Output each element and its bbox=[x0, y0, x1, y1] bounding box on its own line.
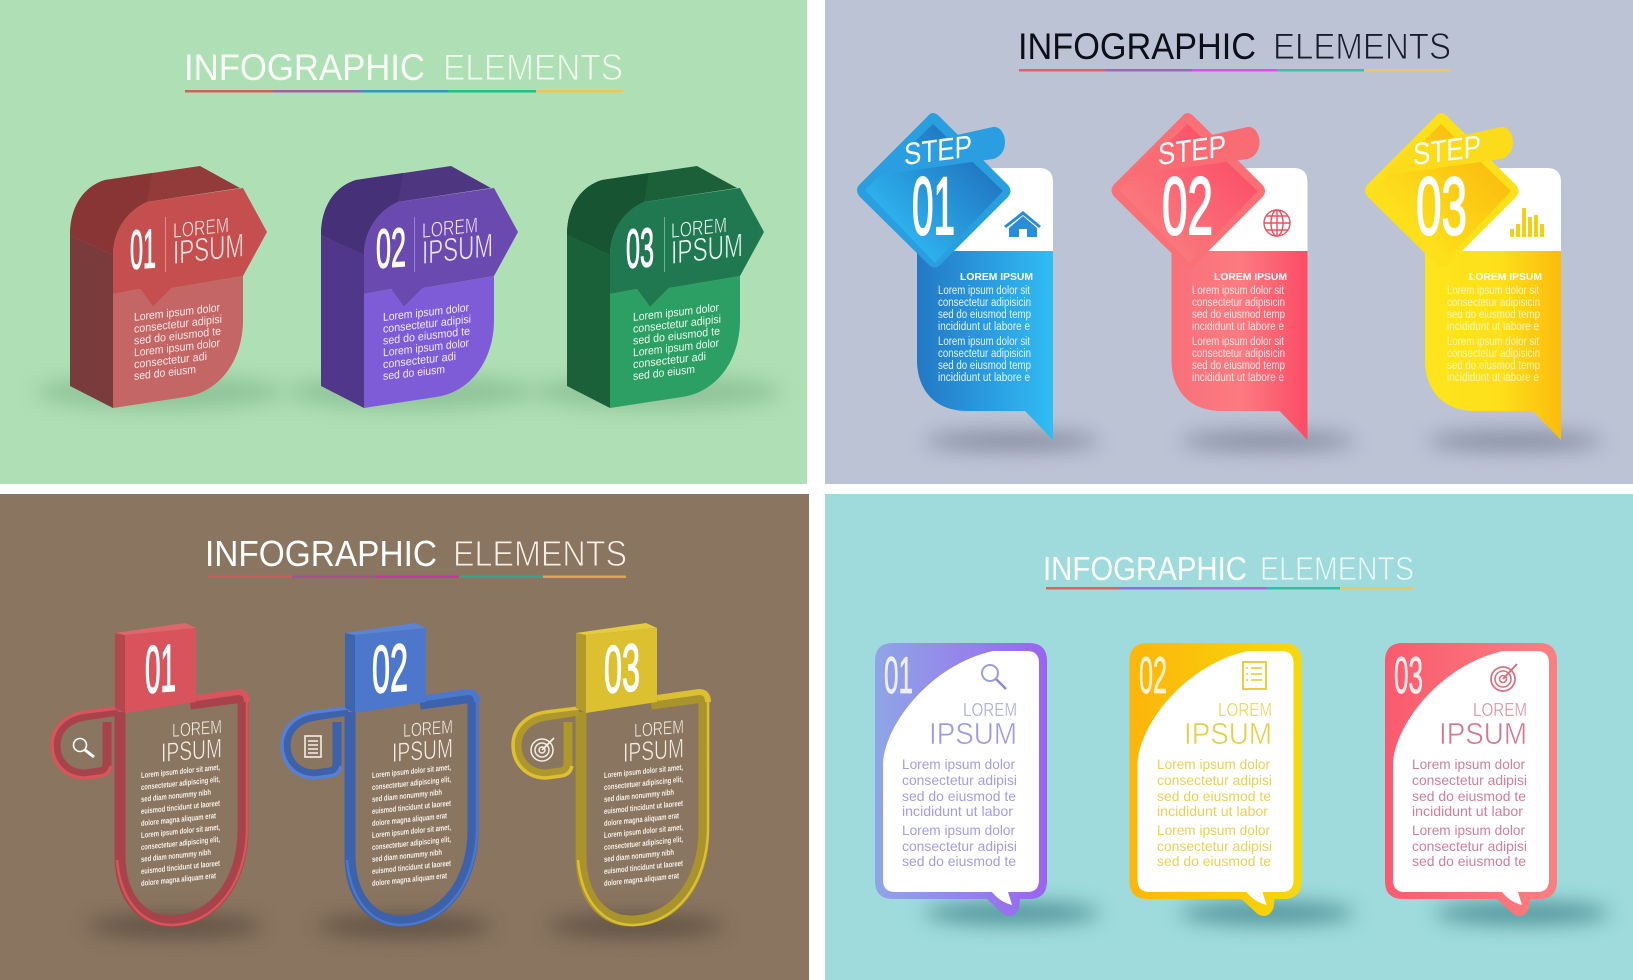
step card 03 yellow: sed do eiusmod temp bbox=[1447, 309, 1540, 321]
tag 01 red outline: Lorem ipsum dolor sit amet, bbox=[141, 823, 220, 840]
step card 03 yellow bbox=[1365, 113, 1603, 450]
step card 01 blue: sed do eiusmod temp bbox=[938, 360, 1031, 372]
bubble 01 purple: 01 bbox=[884, 647, 913, 705]
tag 03 gold outline bbox=[513, 623, 724, 937]
tag 03 gold outline: dolore magna aliquam erat bbox=[604, 811, 679, 828]
step card 03 yellow: sed do eiusmod temp bbox=[1447, 360, 1540, 372]
step card 02 red: 02 bbox=[1162, 161, 1213, 252]
tag 02 blue outline: consectetuer adipiscing elit, bbox=[372, 835, 451, 852]
tag 01 red: consectetur adipisi bbox=[134, 314, 222, 336]
icon: magnifier bbox=[982, 665, 1006, 689]
bubble 02 amber: consectetur adipisi bbox=[1157, 772, 1272, 788]
title: teal panel: INFOGRAPHIC bbox=[1043, 550, 1247, 587]
bubble 03 coral: consectetur adipisi bbox=[1412, 838, 1527, 854]
icon: bar chart bbox=[1510, 208, 1544, 237]
tag 02 blue outline: consectetuer adipiscing elit, bbox=[372, 775, 451, 792]
bubble 01 purple bbox=[875, 643, 1100, 924]
tag 01 red outline: 01 bbox=[145, 631, 176, 708]
step card 01 blue: STEP bbox=[904, 129, 972, 172]
step card 02 red: incididunt ut labore e bbox=[1192, 321, 1284, 333]
icon: magnifier bbox=[74, 738, 94, 757]
bubble 02 amber: Lorem ipsum dolor bbox=[1157, 822, 1270, 838]
tag 01 red: IPSUM bbox=[173, 227, 244, 272]
tag 02 purple: sed do eiusm bbox=[383, 364, 445, 383]
tag 01 red: Lorem ipsum dolor bbox=[134, 338, 220, 359]
step card 01 blue: LOREM IPSUM bbox=[960, 271, 1033, 283]
bubble 01 purple: incididunt ut labor bbox=[902, 803, 1013, 819]
title: lavender panel bbox=[1018, 26, 1451, 72]
title: brown panel bbox=[205, 533, 627, 578]
title: brown panel: ELEMENTS bbox=[453, 533, 627, 574]
tag 02 blue outline: 02 bbox=[372, 630, 408, 708]
step card 02 red: LOREM IPSUM bbox=[1214, 271, 1287, 283]
bubble 03 coral: incididunt ut labor bbox=[1412, 803, 1523, 819]
bubble 03 coral: sed do eiusmod te bbox=[1412, 788, 1526, 804]
tag 03 gold outline: 03 bbox=[604, 630, 640, 708]
tag 02 blue outline: euismod tincidunt ut laoreet bbox=[372, 799, 451, 816]
bubble 01 purple: sed do eiusmod te bbox=[902, 788, 1016, 804]
title: green panel bbox=[184, 47, 623, 92]
tag 03 gold outline: euismod tincidunt ut laoreet bbox=[604, 799, 683, 816]
tag 02 purple: Lorem ipsum dolor bbox=[383, 302, 469, 324]
tag 02 purple bbox=[286, 166, 536, 410]
tag 01 red outline: Lorem ipsum dolor sit amet, bbox=[141, 763, 220, 780]
tag 03 gold outline: IPSUM bbox=[623, 733, 684, 768]
tag 01 red outline: dolore magna aliquam erat bbox=[141, 871, 216, 888]
step card 01 blue bbox=[857, 113, 1100, 450]
bubble 02 amber: IPSUM bbox=[1184, 716, 1272, 751]
step card 01 blue: Lorem ipsum dolor sit bbox=[938, 285, 1031, 297]
tag 02 blue outline: Lorem ipsum dolor sit amet, bbox=[372, 823, 451, 840]
step card 03 yellow: incididunt ut labore e bbox=[1447, 321, 1539, 333]
step card 03 yellow: Lorem ipsum dolor sit bbox=[1447, 285, 1540, 297]
title: green panel: ELEMENTS bbox=[443, 47, 623, 88]
bubble 03 coral: Lorem ipsum dolor bbox=[1412, 822, 1525, 838]
step card 03 yellow: LOREM IPSUM bbox=[1469, 271, 1542, 283]
step card 01 blue: consectetur adipisicin bbox=[938, 297, 1031, 309]
step card 03 yellow: Lorem ipsum dolor sit bbox=[1447, 336, 1540, 348]
tag 03 green: consectetur adi bbox=[633, 351, 706, 371]
tag 02 purple: LOREM bbox=[422, 214, 478, 243]
bubble 01 purple: sed do eiusmod te bbox=[902, 853, 1016, 869]
tag 03 gold outline: Lorem ipsum dolor sit amet, bbox=[604, 763, 683, 780]
tag 01 red outline: sed diam nonummy nibh bbox=[141, 848, 211, 864]
bubble 01 purple: consectetur adipisi bbox=[902, 838, 1017, 854]
step card 01 blue: 01 bbox=[912, 161, 955, 252]
step card 02 red: STEP bbox=[1158, 129, 1226, 172]
bubble 03 coral: consectetur adipisi bbox=[1412, 772, 1527, 788]
tag 03 gold outline: euismod tincidunt ut laoreet bbox=[604, 859, 683, 876]
bubble 02 amber: consectetur adipisi bbox=[1157, 838, 1272, 854]
tag 03 green: Lorem ipsum dolor bbox=[633, 338, 719, 359]
step card 03 yellow: STEP bbox=[1413, 129, 1481, 172]
bubble 02 amber: sed do eiusmod te bbox=[1157, 788, 1271, 804]
tag 03 green: IPSUM bbox=[671, 227, 743, 272]
step card 03 yellow: consectetur adipisicin bbox=[1447, 348, 1540, 360]
tag 03 gold outline: sed diam nonummy nibh bbox=[604, 848, 674, 864]
bubble 03 coral: sed do eiusmod te bbox=[1412, 853, 1526, 869]
title: teal panel bbox=[1043, 550, 1414, 590]
bubble 02 amber: Lorem ipsum dolor bbox=[1157, 756, 1270, 772]
tag 03 gold outline: dolore magna aliquam erat bbox=[604, 871, 679, 888]
step card 01 blue: consectetur adipisicin bbox=[938, 348, 1031, 360]
tag 01 red: sed do eiusmod te bbox=[134, 326, 221, 348]
tag 03 green: 03 bbox=[626, 216, 654, 280]
tag 02 purple: IPSUM bbox=[422, 227, 493, 272]
tag 02 purple: sed do eiusmod te bbox=[383, 326, 470, 348]
bubble 02 amber: incididunt ut labor bbox=[1157, 803, 1268, 819]
step card 02 red: Lorem ipsum dolor sit bbox=[1192, 285, 1285, 297]
title: lavender panel: INFOGRAPHIC bbox=[1018, 26, 1256, 67]
icon: home bbox=[1004, 211, 1041, 237]
bubble 01 purple: IPSUM bbox=[929, 716, 1017, 751]
step card 01 blue: incididunt ut labore e bbox=[938, 321, 1030, 333]
icon: globe bbox=[1264, 210, 1290, 236]
bubble 02 amber: LOREM bbox=[1218, 700, 1272, 720]
tag 03 gold outline: LOREM bbox=[634, 717, 684, 742]
tag 01 red outline: sed diam nonummy nibh bbox=[141, 788, 211, 804]
step card 02 red: incididunt ut labore e bbox=[1192, 372, 1284, 384]
tag 01 red outline: euismod tincidunt ut laoreet bbox=[141, 799, 220, 816]
step card 02 red: consectetur adipisicin bbox=[1192, 297, 1285, 309]
step card 02 red: sed do eiusmod temp bbox=[1192, 360, 1285, 372]
tag 02 purple: Lorem ipsum dolor bbox=[383, 338, 469, 359]
tag 03 gold outline: consectetuer adipiscing elit, bbox=[604, 775, 683, 792]
bubble 01 purple: Lorem ipsum dolor bbox=[902, 822, 1015, 838]
tag 03 gold outline: Lorem ipsum dolor sit amet, bbox=[604, 823, 683, 840]
step card 01 blue: incididunt ut labore e bbox=[938, 372, 1030, 384]
bubble 03 coral: Lorem ipsum dolor bbox=[1412, 756, 1525, 772]
bubble 02 amber: sed do eiusmod te bbox=[1157, 853, 1271, 869]
step card 02 red: sed do eiusmod temp bbox=[1192, 309, 1285, 321]
tag 01 red outline: dolore magna aliquam erat bbox=[141, 811, 216, 828]
panel: teal speech bubbles bbox=[825, 494, 1633, 980]
tag 02 blue outline: sed diam nonummy nibh bbox=[372, 848, 442, 864]
tag 03 gold outline: sed diam nonummy nibh bbox=[604, 788, 674, 804]
tag 01 red outline: LOREM bbox=[172, 717, 222, 742]
icon: target bbox=[1491, 664, 1517, 691]
bubble 01 purple: consectetur adipisi bbox=[902, 772, 1017, 788]
tag 02 purple: consectetur adipisi bbox=[383, 314, 471, 336]
title: brown panel: INFOGRAPHIC bbox=[205, 533, 437, 574]
tag 01 red: consectetur adi bbox=[134, 351, 207, 371]
bubble 02 amber bbox=[1130, 643, 1355, 924]
tag 03 green: sed do eiusmod te bbox=[633, 326, 720, 348]
bubble 03 coral: LOREM bbox=[1473, 700, 1527, 720]
bubble 03 coral: 03 bbox=[1394, 647, 1423, 705]
tag 02 blue outline: Lorem ipsum dolor sit amet, bbox=[372, 763, 451, 780]
panel: brown outlined tags bbox=[0, 494, 809, 980]
panel: lavender step cards bbox=[825, 0, 1633, 484]
tag 01 red: Lorem ipsum dolor bbox=[134, 302, 220, 324]
icon: checklist bbox=[1243, 662, 1266, 689]
tag 01 red: sed do eiusm bbox=[134, 364, 196, 383]
tag 03 gold outline: consectetuer adipiscing elit, bbox=[604, 835, 683, 852]
tag 01 red: 01 bbox=[130, 217, 156, 281]
step card 01 blue: sed do eiusmod temp bbox=[938, 309, 1031, 321]
tag 01 red outline bbox=[52, 623, 263, 937]
title: lavender panel: ELEMENTS bbox=[1273, 26, 1451, 67]
title: teal panel: ELEMENTS bbox=[1260, 550, 1414, 587]
tag 02 blue outline: dolore magna aliquam erat bbox=[372, 871, 447, 888]
title: green panel: INFOGRAPHIC bbox=[184, 47, 425, 88]
tag 01 red outline: IPSUM bbox=[161, 733, 222, 768]
tag 01 red: LOREM bbox=[173, 214, 229, 243]
tag 01 red outline: euismod tincidunt ut laoreet bbox=[141, 859, 220, 876]
step card 02 red bbox=[1112, 113, 1356, 450]
bubble 01 purple: LOREM bbox=[963, 700, 1017, 720]
bubble 03 coral bbox=[1385, 643, 1610, 924]
tag 02 blue outline bbox=[282, 623, 493, 937]
step card 03 yellow: consectetur adipisicin bbox=[1447, 297, 1540, 309]
tag 03 green: LOREM bbox=[671, 214, 727, 243]
panel: green 3D tags bbox=[0, 0, 807, 484]
tag 03 green bbox=[532, 166, 782, 410]
step card 02 red: Lorem ipsum dolor sit bbox=[1192, 336, 1285, 348]
icon: target bbox=[531, 738, 554, 761]
icon: checklist bbox=[305, 736, 321, 757]
tag 02 purple: consectetur adi bbox=[383, 351, 456, 371]
step card 03 yellow: 03 bbox=[1416, 161, 1467, 252]
bubble 03 coral: IPSUM bbox=[1439, 716, 1527, 751]
tag 03 green: consectetur adipisi bbox=[633, 314, 721, 336]
bubble 02 amber: 02 bbox=[1139, 647, 1167, 705]
step card 01 blue: Lorem ipsum dolor sit bbox=[938, 336, 1031, 348]
tag 02 purple: 02 bbox=[376, 216, 406, 280]
tag 02 blue outline: euismod tincidunt ut laoreet bbox=[372, 859, 451, 876]
tag 03 green: sed do eiusm bbox=[633, 364, 695, 383]
tag 01 red outline: consectetuer adipiscing elit, bbox=[141, 835, 220, 852]
tag 02 blue outline: IPSUM bbox=[392, 733, 453, 768]
tag 02 blue outline: dolore magna aliquam erat bbox=[372, 811, 447, 828]
tag 01 red bbox=[35, 166, 285, 410]
step card 02 red: consectetur adipisicin bbox=[1192, 348, 1285, 360]
bubble 01 purple: Lorem ipsum dolor bbox=[902, 756, 1015, 772]
tag 02 blue outline: sed diam nonummy nibh bbox=[372, 788, 442, 804]
step card 03 yellow: incididunt ut labore e bbox=[1447, 372, 1539, 384]
tag 03 green: Lorem ipsum dolor bbox=[633, 302, 719, 324]
tag 02 blue outline: LOREM bbox=[403, 717, 453, 742]
tag 01 red outline: consectetuer adipiscing elit, bbox=[141, 775, 220, 792]
